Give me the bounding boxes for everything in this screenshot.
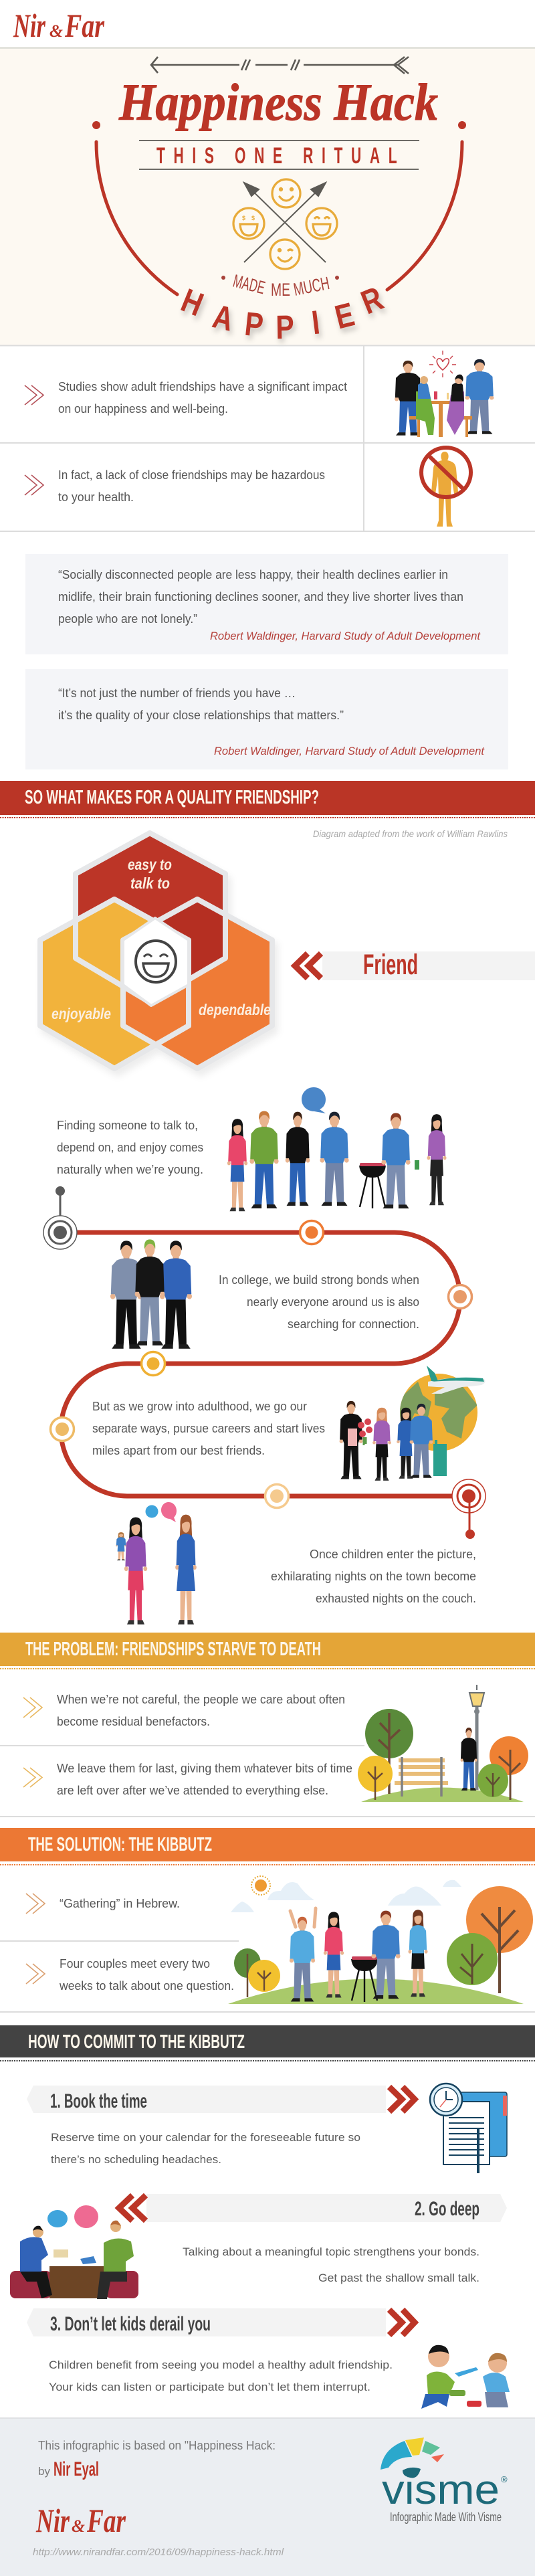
text: Happier: R: [356, 280, 389, 321]
illustration: three college friends: [110, 1239, 192, 1349]
step title: 1. Book the time: [50, 2090, 147, 2112]
text: source note: by: [38, 2465, 50, 2478]
icon: laughing face: [136, 941, 176, 982]
icon: chevrons row 2: [25, 475, 43, 495]
text: Made me much: MADE: [231, 271, 267, 298]
icon: clock, folder and notes: [430, 2084, 507, 2173]
logo: Nir and Far: Nir: [35, 2502, 70, 2539]
text: friendships impact: Studies show adult friendships have a significant impact: [58, 379, 347, 393]
icon: friends around a table: [395, 351, 494, 437]
text: residual benefactors: become residual benefactors.: [57, 1714, 210, 1728]
text: once children: Once children enter the picture,: [310, 1547, 476, 1561]
logo: Visme: visme: [382, 2467, 500, 2513]
step bar: [27, 2308, 386, 2336]
center white hexagon: [123, 918, 189, 1006]
step title: 3. Don’t let kids derail you: [50, 2313, 211, 2335]
text: friendships impact: on our happiness and well-being.: [58, 401, 228, 416]
chart: friendship hexagon venn diagram: [40, 833, 272, 1069]
step title: 2. Go deep: [415, 2198, 479, 2220]
heading: so what makes for a quality friendship: SO WHAT MAKES FOR A QUALITY FRIENDSHIP?: [25, 787, 319, 808]
text: lack of friendships hazardous: [58, 468, 325, 504]
text: residual benefactors: When we’re not careful, the people we care about often: [57, 1692, 345, 1706]
heading: how to commit: HOW TO COMMIT TO THE KIBBUTZ: [28, 2031, 245, 2053]
panel: title banner: $: [242, 215, 245, 221]
labels: three qualities: talk to: [130, 875, 170, 892]
text: Made me much: ME: [271, 280, 290, 300]
icon: top arrow: [151, 57, 409, 74]
text: in college: In college, we build strong bonds when: [219, 1273, 419, 1287]
text: Happier: E: [331, 296, 358, 336]
text: quote body: “It’s not just the number of friends you have …: [58, 686, 296, 700]
text: source note: Nir Eyal: [54, 2458, 99, 2480]
panel: step 2 go deep: [10, 2194, 507, 2299]
text: Happier: P: [243, 305, 265, 344]
chart: life timeline path: [43, 1186, 486, 1539]
text: into adulthood: But as we grow into adulthood, we go our: [92, 1399, 307, 1413]
text: attribution: Robert Waldinger, Harvard Study of Adult Development: [214, 745, 485, 757]
text: quote body: midlife, their brain functioning declines sooner, and they live shorter lives than: [58, 589, 463, 604]
text: quote body: “Socially disconnected people are less happy, their health declines earlier in: [58, 567, 448, 581]
panel: study facts: [0, 345, 535, 531]
step text: [51, 2131, 360, 2166]
text: when young: [57, 1118, 203, 1176]
step text: Reserve time on your calendar for the foreseeable future so: [51, 2131, 360, 2144]
text: residual benefactors: We leave them for last, giving them whatever bits of time: [57, 1761, 352, 1775]
text: lack of friendships hazardous: to your health.: [58, 490, 134, 504]
timeline red line: [61, 1232, 460, 1496]
text: once children: exhausted nights on the couch.: [316, 1591, 476, 1605]
text: once children: [271, 1547, 476, 1605]
text: gathering: “Gathering” in Hebrew.: [60, 1896, 180, 1910]
heading: the solution: THE SOLUTION: THE KIBBUTZ: [28, 1834, 212, 1855]
panel: title banner: [0, 47, 535, 346]
text: into adulthood: separate ways, pursue careers and start lives: [92, 1421, 325, 1435]
text: when young: depend on, and enjoy comes: [57, 1140, 203, 1154]
text: lack of friendships hazardous: In fact, a lack of close friendships may be hazardous: [58, 468, 325, 482]
illustration: globe, plane and parting friends: [340, 1366, 486, 1481]
text: when young: Finding someone to talk to,: [57, 1118, 198, 1132]
timeline nodes: [51, 1220, 472, 1508]
panel: step 3 kids: [27, 2308, 510, 2409]
step bar: [146, 2194, 507, 2222]
step bar: [27, 2086, 386, 2113]
callout: friend arrow: Friend: [363, 949, 418, 981]
icon: chevrons: [23, 1697, 42, 1787]
panel: step 1 book the time: [27, 2084, 507, 2173]
text: attribution: Robert Waldinger, Harvard Study of Adult Development: [210, 630, 481, 642]
logo: Nir and Far: &: [72, 2516, 85, 2536]
logo: Visme: [381, 2437, 508, 2524]
text: into adulthood: [92, 1399, 325, 1457]
text: in college: nearly everyone around us is also: [247, 1295, 419, 1309]
panel: footer: [0, 2417, 535, 2576]
text: quote body: it’s the quality of your close relationships that matters.”: [58, 708, 344, 722]
illustration: kids playing: [421, 2345, 510, 2409]
text: gathering: weeks to talk about one question.: [59, 1979, 234, 1993]
logo: Nir and Far: [13, 7, 104, 44]
text: quote body: [58, 686, 344, 722]
icon: four smiley faces: [233, 179, 337, 269]
text: in college: searching for connection.: [288, 1317, 419, 1331]
illustration: friends at a barbecue: [227, 1087, 447, 1211]
text: source url: http://www.nirandfar.com/2016/09/happiness-hack.html: [33, 2547, 284, 2558]
text: Happier: A: [209, 298, 237, 339]
heading: the problem: THE PROBLEM: FRIENDSHIPS STARVE TO DEATH: [25, 1639, 321, 1660]
text: Made me much: [221, 271, 339, 300]
illustration: kibbutz picnic: [228, 1876, 533, 2004]
icon: chevrons: [26, 1894, 45, 1984]
logo: Visme: ®: [501, 2474, 508, 2484]
icon: body with prohibition sign: [421, 448, 471, 527]
text: Happier: I: [310, 304, 322, 341]
text: diagram credit: Diagram adapted from the work of William Rawlins: [313, 828, 508, 839]
step text: Get past the shallow small talk.: [318, 2272, 479, 2284]
text: Made me much: MUCH: [292, 273, 331, 300]
heading: how to commit: [0, 2025, 535, 2061]
text: residual benefactors: [57, 1692, 352, 1797]
text: friendships impact: [58, 379, 347, 416]
text: once children: exhilarating nights on the town become: [271, 1569, 476, 1583]
step text: Your kids can listen or participate but don’t let them interrupt.: [49, 2381, 370, 2393]
labels: three qualities: easy to: [128, 856, 172, 873]
heading: the problem: [0, 1633, 535, 1669]
step text: Children benefit from seeing you model a healthy adult friendship.: [49, 2359, 393, 2371]
logo: Nir and Far: &: [49, 21, 63, 41]
text: into adulthood: miles apart from our best friends.: [92, 1443, 265, 1457]
text: in college: [219, 1273, 419, 1331]
text: source note: [38, 2439, 276, 2480]
panel: title banner: $: [251, 215, 255, 221]
end pin: [452, 1479, 486, 1539]
step text: there’s no scheduling headaches.: [51, 2153, 221, 2166]
text: when young: naturally when we’re young.: [57, 1162, 203, 1176]
text: Happier: [176, 280, 389, 346]
illustration: moms on the phone: [116, 1502, 197, 1625]
heading: so what makes for a quality friendship: [0, 781, 535, 818]
text: gathering: Four couples meet every two: [60, 1956, 210, 1970]
text: gathering: [59, 1896, 234, 1993]
subtitle: This one ritual: THIS ONE RITUAL: [156, 143, 397, 168]
title: Happiness Hack: Happiness Hack: [118, 73, 438, 131]
panel: solution points: [0, 1876, 535, 2012]
callout: friend arrow: [295, 949, 535, 981]
step text: [183, 2245, 479, 2284]
text: quote body: people who are not lonely.”: [58, 612, 197, 626]
logo: Nir and Far: Far: [64, 7, 104, 44]
labels: three qualities: [51, 856, 271, 1022]
panel: quote two: [25, 669, 508, 769]
step text: Talking about a meaningful topic strengthens your bonds.: [183, 2245, 479, 2258]
badge arc: [92, 121, 466, 294]
icon: crossed arrows: [244, 183, 326, 262]
text: quote body: [58, 567, 463, 626]
logo: Nir and Far: Nir: [13, 7, 45, 44]
text: Happier: H: [176, 282, 209, 323]
illustration: two friends talking: [10, 2205, 138, 2299]
text: source note: This infographic is based on "Happiness Hack:: [38, 2439, 276, 2452]
icon: chevrons row 1: [25, 385, 43, 405]
labels: three qualities: enjoyable: [51, 1005, 111, 1022]
heading: the solution: [0, 1828, 535, 1865]
logo: Nir and Far: Far: [86, 2502, 126, 2539]
flowers: [348, 1418, 372, 1446]
panel: problem points: [0, 1685, 535, 1817]
labels: three qualities: dependable: [199, 1001, 271, 1018]
plane: [427, 1366, 486, 1394]
panel: quote one: [25, 554, 508, 654]
start pin: [43, 1186, 77, 1249]
logo: Nir and Far: [35, 2502, 126, 2539]
step text: [49, 2359, 393, 2393]
suitcase: [433, 1440, 447, 1476]
text: residual benefactors: are left over after we’ve attended to everything else.: [57, 1783, 328, 1797]
illustration: park bench and lonely man: [358, 1685, 528, 1802]
text: Happier: P: [276, 308, 294, 346]
